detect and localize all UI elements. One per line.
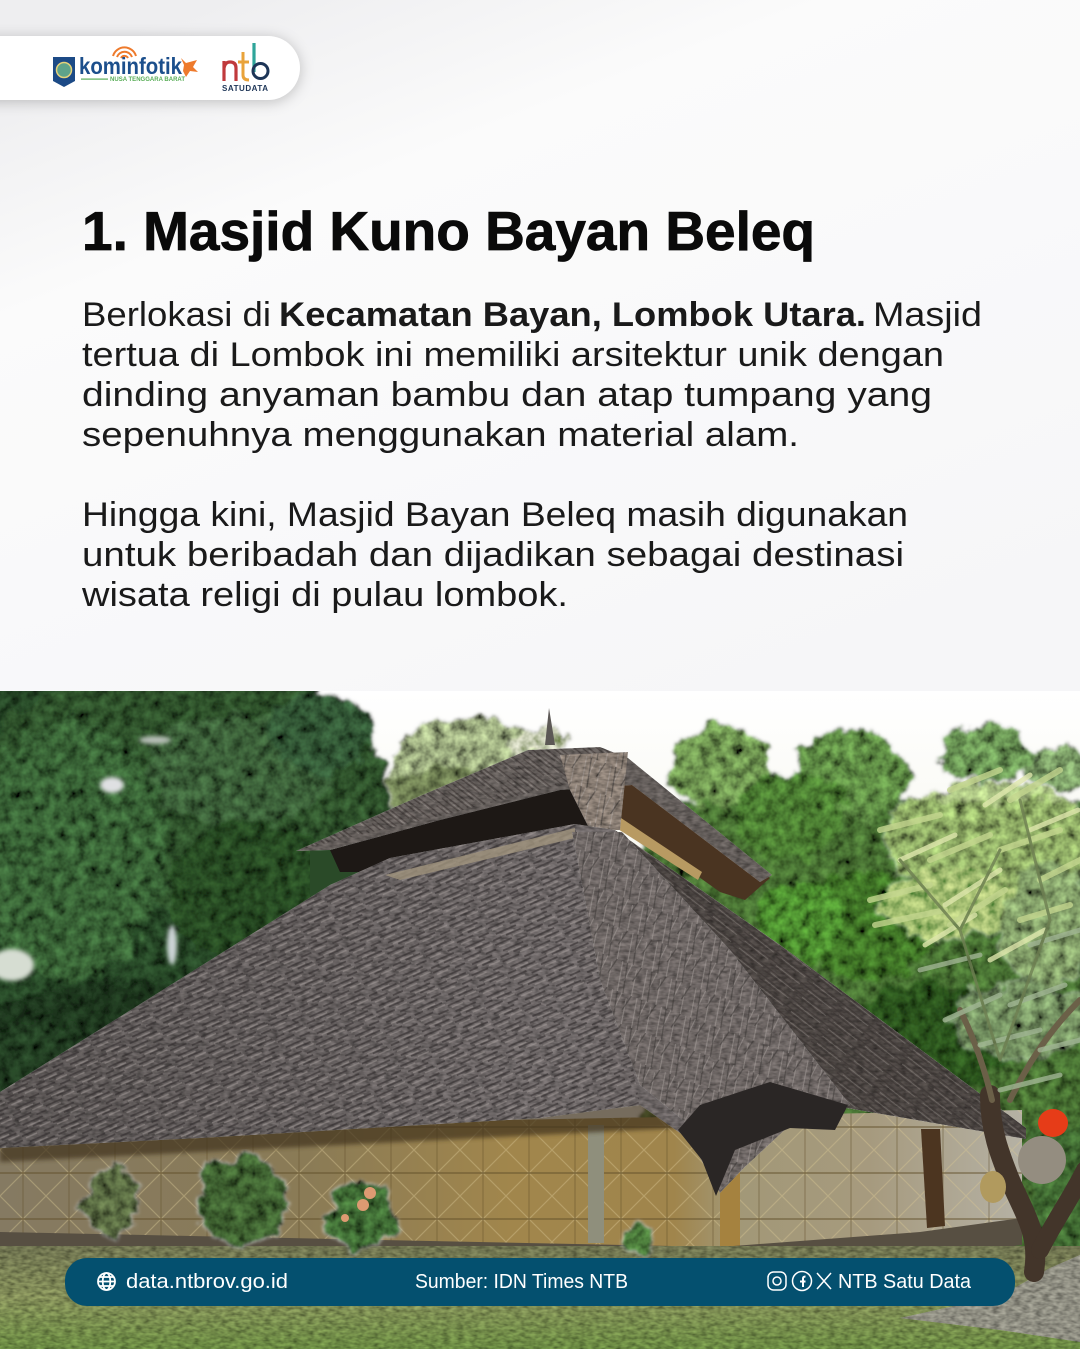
- upper roof underside: [330, 785, 770, 900]
- title: 1. Masjid Kuno Bayan Beleq: [82, 200, 815, 262]
- icon: NTB shield: [53, 57, 75, 87]
- paragraph 1: Berlokasi di: [82, 296, 271, 334]
- grass: [0, 1246, 1080, 1349]
- left tree: [0, 670, 390, 1100]
- upper thatched roof: [296, 747, 772, 882]
- bamboo wall: [0, 1100, 1022, 1250]
- icon: deer: [181, 58, 198, 77]
- social handle: NTB Satu Data: [838, 1270, 972, 1293]
- paragraph 1: [82, 296, 982, 454]
- icon: globe: [98, 1273, 115, 1290]
- flowers: [341, 1187, 376, 1222]
- stone path: [900, 1255, 1080, 1342]
- frangipani foliage mass: [880, 780, 1080, 1060]
- background: [0, 0, 1080, 691]
- icon: X: [817, 1273, 831, 1289]
- woven panel: [980, 1171, 1006, 1203]
- stone base: [0, 1218, 1022, 1246]
- paragraph 1: Kecamatan Bayan, Lombok Utara.: [279, 296, 866, 334]
- frangipani leaves: [870, 770, 1080, 1090]
- shrubs: [82, 1154, 656, 1253]
- red lantern: [1038, 1109, 1068, 1137]
- background trees behind left roof: [381, 712, 572, 809]
- paragraph 2: wisata religi di pulau lombok.: [81, 576, 568, 614]
- footer bar: [65, 1258, 1015, 1306]
- paragraph 2: untuk beribadah dan dijadikan sebagai destinasi: [82, 536, 904, 574]
- paragraph 1: Masjid: [873, 296, 982, 334]
- icon: instagram: [768, 1272, 786, 1290]
- header logo pill: [0, 36, 300, 100]
- paragraph 1: dinding anyaman bambu dan atap tumpang yang: [82, 376, 932, 414]
- paragraph 2: [81, 496, 908, 614]
- sky: [322, 691, 1080, 716]
- Nusa Tenggara Barat tagline: NUSA TENGGARA BARAT: [110, 77, 185, 83]
- source: Sumber: IDN Times NTB: [415, 1270, 628, 1293]
- NTB Satu Data logo: [222, 43, 268, 93]
- top roof spire: [545, 708, 555, 745]
- statue: [1018, 1136, 1066, 1184]
- paragraph 2: Hingga kini, Masjid Bayan Beleq masih digunakan: [82, 496, 908, 534]
- NTB Satu Data logo: SATUDATA: [222, 84, 268, 93]
- background trees right: [640, 723, 1080, 1260]
- paragraph 1: sepenuhnya menggunakan material alam.: [82, 416, 799, 454]
- icon: signal arcs: [113, 47, 136, 58]
- foliage patch under upper roof: [310, 850, 359, 897]
- kominfotik wordmark: kominfotik: [79, 53, 182, 79]
- frangipani trunk: [960, 1000, 1080, 1272]
- main roof: [0, 824, 1026, 1196]
- sky gaps in left tree: [0, 736, 177, 981]
- door: [921, 1129, 945, 1228]
- website: data.ntbrov.go.id: [126, 1270, 288, 1293]
- photo: Masjid Bayan Beleq: [0, 670, 1080, 1349]
- paragraph 1: tertua di Lombok ini memiliki arsitektur unik dengan: [82, 336, 944, 374]
- icon: facebook: [792, 1272, 812, 1290]
